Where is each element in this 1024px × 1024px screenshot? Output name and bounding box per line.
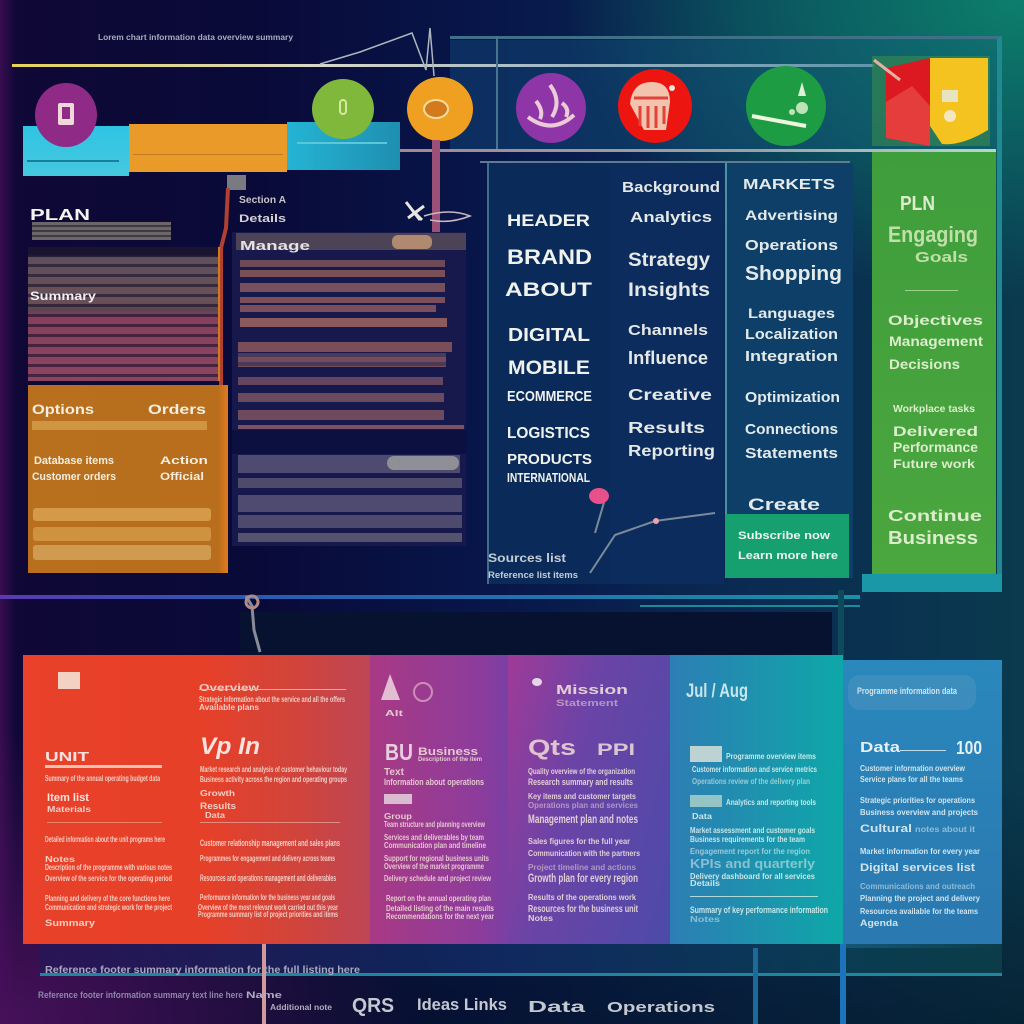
- card 4 text: Management plan and notes: [528, 812, 638, 826]
- bottom cards text: [45, 672, 982, 928]
- card 3 text: Text: [384, 767, 405, 778]
- card 4 text: Results of the operations work: [528, 893, 637, 902]
- card 1 text: Materials: [47, 805, 92, 814]
- column 3 text: [743, 176, 842, 514]
- card 4 text: Resources for the business unit: [528, 904, 638, 915]
- header caption: Lorem chart information data overview summary: [98, 33, 294, 42]
- bottom panel: violet card: [508, 655, 670, 944]
- column 2 text: Background: [622, 179, 720, 196]
- green column text: Decisions: [889, 356, 960, 372]
- card 6 text: Agenda: [860, 918, 899, 928]
- column 3 text: Statements: [745, 445, 838, 462]
- header trend line: [320, 28, 435, 76]
- icon: red and yellow flag: [872, 56, 990, 146]
- pink stem: [262, 944, 266, 1024]
- card 6 text: Planning the project and delivery: [860, 894, 981, 903]
- card 4 text: [528, 678, 640, 923]
- card 4 text: Mission: [556, 682, 628, 697]
- card 2 text: Market research and analysis of customer behaviour today: [200, 765, 347, 774]
- card 5 text: Summary of key performance information: [690, 905, 828, 915]
- column 3 text: Operations: [745, 237, 838, 254]
- right column teal base: [862, 574, 1002, 592]
- heading: PLAN: [30, 207, 90, 224]
- column 1 text: ECOMMERCE: [507, 388, 592, 405]
- card 2 text: Programme summary list of project priorities and items: [198, 910, 338, 919]
- row labels: Customer orders: [32, 471, 116, 483]
- teal vertical rule: [838, 590, 844, 658]
- column 2 frame: [609, 163, 724, 584]
- card 3 text: Recommendations for the next year: [386, 912, 494, 921]
- column 3 frame: [725, 163, 853, 578]
- bottom frame: [40, 944, 1002, 976]
- card 2 text: Vp In: [200, 733, 260, 760]
- card 3 text: Business: [418, 746, 478, 758]
- card 3 text: Communication plan and timeline: [384, 841, 486, 850]
- card 1 text: Notes: [45, 855, 76, 864]
- icon: pink flower and branch: [589, 488, 716, 574]
- column 1 text: DIGITAL: [508, 325, 590, 345]
- column 1 text: PRODUCTS: [507, 451, 592, 468]
- column 2 text: Channels: [628, 322, 708, 339]
- card 3 text: Delivery schedule and project review: [384, 874, 492, 883]
- card 3 text: Alt: [385, 709, 404, 718]
- icon: violet circle: [516, 73, 586, 143]
- column 1 text: MOBILE: [508, 358, 590, 379]
- column 2 text: [622, 179, 720, 460]
- icon: red circle: [618, 69, 692, 143]
- header ribbon: [23, 122, 400, 176]
- ribbon: cyan right: [287, 122, 400, 170]
- card 3 text: Team structure and planning overview: [384, 820, 486, 829]
- card 2 text: Business activity across the region and operating groups: [200, 775, 347, 784]
- card 3 text: BU: [385, 739, 413, 765]
- green column text: [888, 193, 983, 548]
- card 5 text: Business requirements for the team: [690, 835, 805, 844]
- column 1 text: Reference list items: [488, 570, 578, 580]
- icon: orange circle: [407, 77, 473, 141]
- pale logo: [387, 456, 459, 470]
- card 3 text: Services and deliverables by team: [384, 833, 484, 842]
- callout text: [738, 530, 838, 562]
- card 5 text: Delivery dashboard for all services: [690, 872, 816, 881]
- column 2 text: Creative: [628, 387, 712, 404]
- card 4 text: Research summary and results: [528, 777, 633, 787]
- centre panel labels: [239, 195, 310, 253]
- top frame panel: [450, 40, 1002, 152]
- card 6 text: Data: [860, 739, 901, 756]
- small label: Summary: [30, 289, 96, 303]
- green column text: Objectives: [888, 312, 983, 328]
- card 4 text: Sales figures for the full year: [528, 837, 630, 846]
- card 4 text: Statement: [556, 698, 618, 708]
- green column text: Goals: [915, 249, 968, 266]
- green column text: Management: [889, 333, 983, 349]
- column 3 text: Connections: [745, 421, 838, 438]
- centre panel labels: Manage: [240, 238, 310, 253]
- orange band one: [33, 508, 211, 521]
- column 3 text: Shopping: [745, 263, 842, 285]
- card 5 text: Data: [692, 812, 713, 821]
- row labels: [32, 401, 208, 483]
- footer text: [38, 965, 715, 1017]
- footer text: Reference footer information summary text line here: [38, 990, 243, 1000]
- panel: green right column: [872, 152, 996, 574]
- card 3 text: [381, 674, 494, 921]
- second divider line: [480, 161, 850, 163]
- card 1 text: [45, 672, 172, 928]
- card 6 text: Business overview and projects: [860, 808, 979, 817]
- card 1 text: Communication and strategic work for the project: [45, 903, 172, 912]
- card 1 text: UNIT: [45, 749, 89, 764]
- card 5 text: KPIs and quarterly: [690, 856, 816, 871]
- card 1 text: Planning and delivery of the core functions here: [45, 894, 170, 903]
- card 5 text: Market assessment and customer goals: [690, 826, 815, 835]
- blue stem: [840, 944, 846, 1024]
- card 2 text: Data: [205, 811, 226, 820]
- vertical pink connector: [432, 140, 440, 250]
- column 3 text: Create: [748, 495, 820, 514]
- card 1 text: Overview of the service for the operating period: [45, 874, 172, 883]
- green column text: Future work: [893, 457, 975, 471]
- card 6 text: Cultural: [860, 823, 912, 835]
- card 4 text: Qts: [528, 735, 576, 760]
- card 6 text: Strategic priorities for operations: [860, 796, 975, 805]
- green column text: Workplace tasks: [893, 404, 975, 415]
- footer text: Name: [246, 990, 282, 1000]
- card 5 text: Notes: [690, 915, 721, 924]
- column 2 text: Results: [628, 420, 705, 437]
- card 1 text: Summary of the annual operating budget data: [45, 774, 160, 783]
- column text: [488, 176, 842, 580]
- sub bar: [32, 222, 171, 240]
- panel: centre dark stripes: [232, 232, 466, 546]
- footer text: QRS: [352, 995, 394, 1017]
- gap: [232, 430, 466, 454]
- footer text: Reference footer summary information for the full listing here: [45, 965, 360, 976]
- column 3 text: Optimization: [745, 389, 840, 406]
- card 4 text: Operations plan and services: [528, 801, 639, 810]
- card 5 text: Jul / Aug: [686, 681, 748, 702]
- card 5 text: Operations review of the delivery plan: [692, 777, 810, 786]
- card 2 text: Performance information for the business year and goals: [200, 893, 335, 902]
- card 1 text: Item list: [47, 792, 89, 804]
- row labels: Official: [160, 471, 204, 483]
- icon: purple circle: [35, 83, 97, 147]
- card 4 text: Project timeline and actions: [528, 863, 637, 872]
- stripes middle group: [238, 342, 452, 352]
- card 1 text: Description of the programme with various notes: [45, 863, 172, 872]
- card 2 text: Resources and operations management and deliverables: [200, 873, 336, 883]
- panel: dark left block: [28, 207, 220, 381]
- card 3 text: Information about operations: [384, 777, 484, 787]
- card 5 text: Customer information and service metrics: [692, 765, 817, 774]
- bottom panel: teal card: [670, 655, 843, 944]
- card 2 text: Overview: [199, 683, 259, 694]
- orange band three: [33, 545, 211, 560]
- green column text: Delivered: [893, 423, 978, 439]
- card 5 text: Engagement report for the region: [690, 847, 810, 856]
- card 4 text: Quality overview of the organization: [528, 767, 635, 776]
- column 1 text: HEADER: [507, 211, 590, 230]
- card 4 text: Growth plan for every region: [528, 871, 638, 885]
- column 2 text: Insights: [628, 280, 710, 301]
- column 3 text: Integration: [745, 348, 838, 365]
- top frame border: [450, 36, 1002, 592]
- column 1 text: BRAND: [507, 246, 592, 269]
- column 2 text: Strategy: [628, 250, 710, 271]
- card 2 text: Strategic information about the service and all the offers: [199, 695, 345, 704]
- card 4 text: Key items and customer targets: [528, 792, 636, 801]
- card 3 text: Support for regional business units: [384, 854, 489, 863]
- column 1 text: ABOUT: [505, 280, 592, 301]
- divider line under icons: [400, 149, 996, 152]
- centre panel labels: Details: [239, 213, 286, 225]
- centre panel labels: Section A: [239, 195, 286, 206]
- card 5 text: [686, 681, 828, 924]
- callout text: Subscribe now: [738, 530, 831, 542]
- card 6 text: Customer information overview: [860, 764, 966, 773]
- header band: [236, 233, 466, 250]
- striped table: [28, 247, 220, 381]
- card 6 text: Programme information data: [857, 686, 958, 696]
- stripes bottom group: [238, 455, 460, 473]
- green column text: Continue: [888, 508, 982, 525]
- card 3 text: Detailed listing of the main results: [386, 904, 494, 913]
- card 6 text: [848, 675, 982, 928]
- column 1 frame: [487, 163, 609, 584]
- icon: floral sprig: [404, 201, 472, 222]
- dark band: [240, 612, 832, 657]
- left red rule: [219, 188, 230, 385]
- card 5 text: Programme overview items: [726, 752, 816, 761]
- card 6 text: Service plans for all the teams: [860, 775, 963, 784]
- card 1 text: Detailed information about the unit programs here: [45, 835, 165, 844]
- bottom panel: blue card: [843, 660, 1002, 948]
- thin blue stem: [753, 948, 758, 1024]
- column 2 text: Reporting: [628, 443, 715, 460]
- row bar: [32, 421, 207, 430]
- card 3 text: Description of the item: [418, 757, 482, 763]
- bottom panel: red cards: [23, 655, 370, 944]
- card 5 text: Details: [690, 879, 721, 888]
- row labels: Action: [160, 455, 208, 467]
- card 2 text: Available plans: [199, 703, 260, 712]
- card 3 text: Group: [384, 812, 412, 821]
- ribbon: orange centre: [129, 124, 287, 172]
- panel: orange left block: [28, 385, 228, 573]
- panel: green callout: [725, 514, 849, 578]
- mid horizontal line: [0, 595, 860, 599]
- ribbon: cyan left: [23, 126, 129, 176]
- stripes top group: [240, 260, 445, 267]
- card 2 text: Results: [200, 801, 236, 811]
- card 6 text: Resources available for the teams: [860, 907, 979, 916]
- column 3 text: Localization: [745, 326, 838, 343]
- icon: lime circle: [312, 79, 374, 139]
- green column text: Engaging: [888, 222, 978, 247]
- bottom panel: magenta card: [370, 655, 508, 944]
- card 6 text: 100: [956, 738, 982, 758]
- card 2 text: [198, 683, 347, 919]
- card 3 text: Report on the annual operating plan: [386, 894, 491, 903]
- green column text: Performance: [893, 439, 978, 455]
- footer text: Operations: [607, 999, 715, 1016]
- top header line: [12, 64, 874, 67]
- card 5 text: Analytics and reporting tools: [726, 798, 816, 807]
- pin icon: [244, 594, 262, 652]
- callout text: Learn more here: [738, 550, 838, 562]
- column 1 text: INTERNATIONAL: [507, 470, 590, 485]
- row labels: Database items: [34, 455, 114, 467]
- card 6 text: Digital services list: [860, 862, 975, 874]
- column 1 text: Sources list: [488, 551, 566, 565]
- row labels: Orders: [148, 401, 206, 417]
- card 2 text: Customer relationship management and sales plans: [200, 838, 340, 848]
- card 4 text: PPI: [597, 740, 635, 759]
- card 3 text: Overview of the market programme: [384, 862, 484, 871]
- footer text: Additional note: [270, 1003, 333, 1012]
- card 2 text: Growth: [200, 789, 235, 798]
- row labels: Options: [32, 401, 94, 417]
- frame left rule: [496, 36, 498, 151]
- green column text: PLN: [900, 193, 935, 215]
- card 6 text: notes about it: [915, 825, 975, 834]
- card 4 text: Notes: [528, 914, 554, 923]
- column 2 text: Analytics: [630, 209, 712, 226]
- column 1 text: LOGISTICS: [507, 425, 590, 442]
- column 1 text: [488, 211, 592, 580]
- orange band two: [33, 527, 211, 541]
- orange chip: [392, 235, 432, 249]
- green column text: Business: [888, 528, 978, 548]
- icon: green circle: [746, 66, 826, 146]
- column 3 text: MARKETS: [743, 176, 835, 193]
- card 2 text: Overview of the most relevant work carried out this year: [198, 903, 338, 912]
- teal mid rule: [640, 605, 860, 607]
- card 6 text: Market information for every year: [860, 847, 980, 856]
- card 4 text: Communication with the partners: [528, 849, 640, 858]
- card 2 text: Programmes for engagement and delivery across teams: [200, 854, 335, 863]
- column 3 text: Languages: [748, 305, 835, 321]
- column 3 text: Advertising: [745, 207, 838, 223]
- column 2 text: Influence: [628, 348, 708, 368]
- footer text: Data: [528, 999, 585, 1016]
- green column divider: [905, 290, 958, 291]
- small box above rule: [227, 175, 246, 190]
- card 1 text: Summary: [45, 918, 95, 928]
- card 6 text: Communications and outreach: [860, 882, 975, 891]
- footer text: Ideas Links: [417, 995, 507, 1014]
